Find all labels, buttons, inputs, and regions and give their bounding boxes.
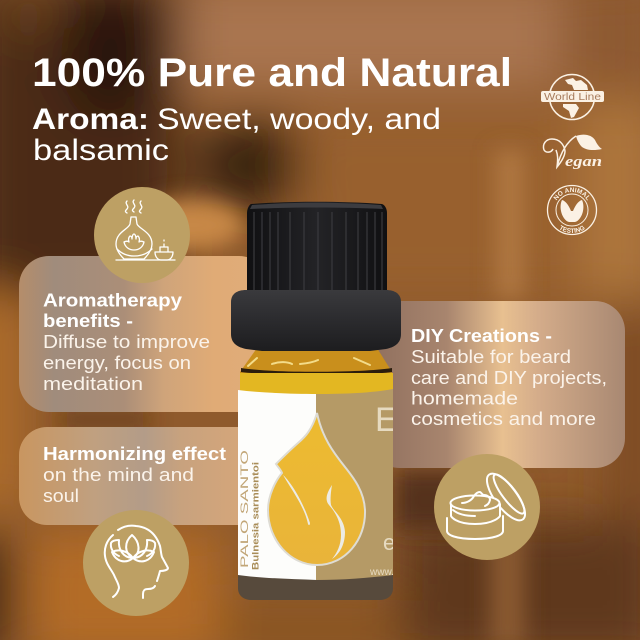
panel: harmonizing: [19, 427, 269, 525]
panel: DIY creations: [370, 301, 625, 468]
label latin name: Bulnesia sarmientoi: [250, 462, 260, 570]
bottle shoulder and neck: [240, 348, 392, 392]
oil drop: [268, 413, 365, 565]
DIY text: homemade: [411, 388, 518, 408]
harmonizing text: soul: [43, 485, 79, 506]
label name text: PALO SANTO: [239, 449, 251, 568]
bottle base: [238, 575, 393, 600]
aromatherapy text: benefits -: [43, 310, 133, 331]
cap ridges: [254, 212, 382, 290]
brand text on label: [370, 408, 393, 575]
DIY text: DIY Creations -: [411, 325, 552, 346]
aromatherapy text: [43, 290, 210, 394]
brand text on label: EJ: [375, 401, 415, 439]
label tan half: [316, 389, 393, 580]
DIY text: Suitable for beard: [411, 346, 571, 367]
DIY text: [411, 325, 607, 429]
icon: diffuser: [94, 187, 190, 283]
aromatherapy text: Aromatherapy: [43, 290, 183, 310]
brand text on label: e: [383, 530, 395, 555]
aroma subtitle: Sweet, woody, and: [157, 103, 441, 136]
cap top rim: [250, 203, 383, 209]
logo: Vegan: [543, 135, 602, 170]
dark oil line: [241, 368, 392, 375]
logo: no animal testing: [546, 184, 598, 236]
logo: no animal testing: NO ANIMAL: [553, 188, 590, 200]
DIY text: cosmetics and more: [411, 408, 596, 429]
harmonizing text: Harmonizing effect: [43, 443, 226, 464]
aroma subtitle: balsamic: [33, 134, 169, 167]
logo: World Line: [541, 74, 604, 120]
logo: Vegan: egan: [565, 154, 602, 170]
aromatherapy text: meditation: [43, 373, 143, 394]
brand text on label: www.: [369, 567, 394, 578]
harmonizing text: on the mind and: [43, 464, 194, 485]
cap collar: [231, 290, 401, 351]
harmonizing text: [43, 443, 226, 506]
icon: head with lotus: [83, 510, 189, 616]
neck highlights: [248, 358, 370, 366]
yellow oil band: [240, 373, 393, 394]
aroma subtitle: [32, 103, 441, 167]
logo: World Line: World Line: [544, 92, 602, 103]
DIY text: care and DIY projects,: [411, 367, 607, 388]
aroma subtitle: Aroma:: [32, 103, 149, 136]
aromatherapy text: Diffuse to improve: [43, 331, 210, 352]
drop flame strokes: [283, 475, 345, 559]
title: 100% Pure and Natural: [32, 51, 512, 95]
panel: aromatherapy: [19, 256, 269, 412]
aromatherapy text: energy, focus on: [43, 352, 191, 373]
cap knurled top: [247, 202, 387, 291]
label white half: [238, 390, 317, 580]
product bottle: [231, 202, 415, 600]
icon: cream jar: [434, 454, 540, 560]
logo: no animal testing: TESTING: [560, 225, 585, 233]
